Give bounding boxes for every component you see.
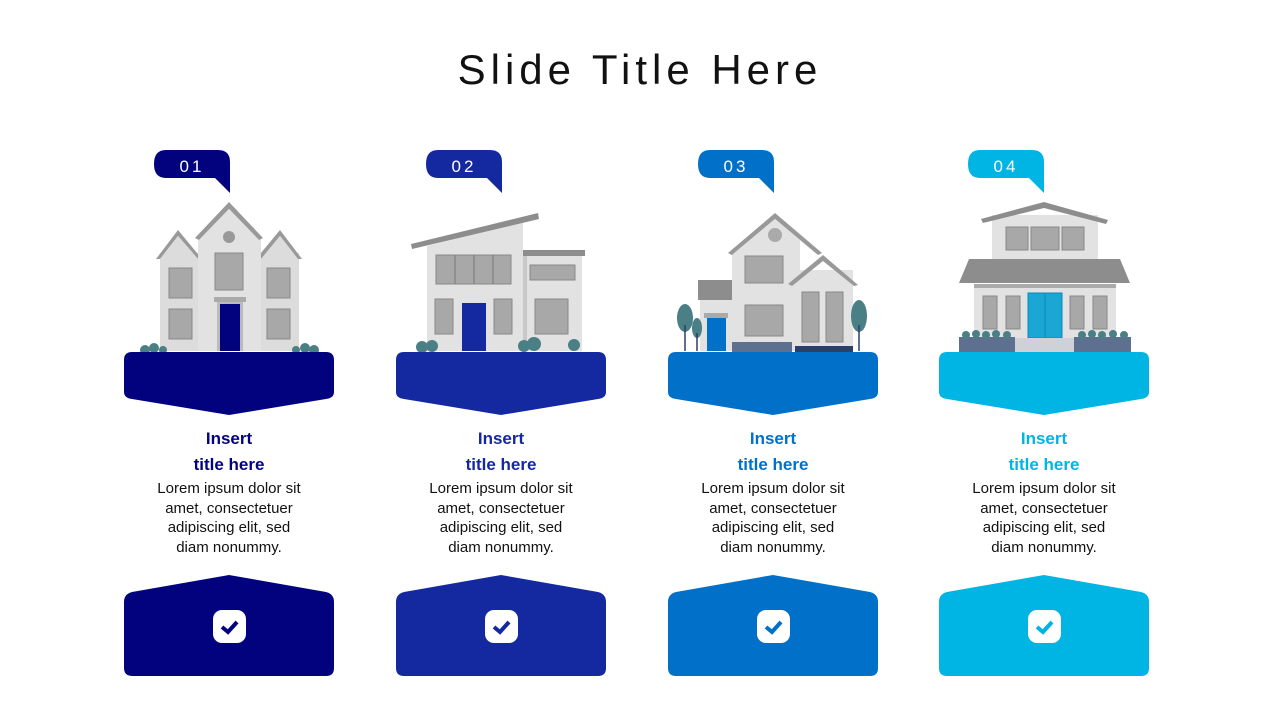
- top panel 3: [668, 352, 878, 415]
- badge 04: [968, 150, 1044, 193]
- text block 1: amet, consectetuer: [165, 500, 293, 516]
- text block 1: Lorem ipsum dolor sit: [157, 480, 301, 497]
- column 2: [396, 150, 606, 676]
- badge 03: 03: [724, 157, 748, 176]
- house 3: [677, 213, 867, 352]
- badge 02: 02: [452, 157, 476, 176]
- text block 4: Insert: [1021, 429, 1067, 448]
- house 4: [959, 202, 1131, 352]
- text block 1: [157, 429, 301, 556]
- badge 03: [698, 150, 774, 193]
- text block 3: amet, consectetuer: [709, 500, 837, 516]
- text block 2: [429, 429, 573, 556]
- top panel 2: [396, 352, 606, 415]
- text block 3: Insert: [750, 429, 796, 448]
- badge 01: 01: [180, 157, 204, 176]
- text block 4: adipiscing elit, sed: [983, 519, 1105, 536]
- text block 2: adipiscing elit, sed: [440, 519, 562, 536]
- text block 2: diam nonummy.: [448, 538, 554, 556]
- badge 02: [426, 150, 502, 193]
- column 4: [939, 150, 1149, 676]
- badge 04: 04: [994, 157, 1018, 176]
- text block 4: title here: [1009, 454, 1079, 474]
- bottom card 3: [668, 575, 878, 676]
- text block 3: [701, 429, 845, 556]
- text block 1: diam nonummy.: [176, 538, 282, 556]
- top panel 1: [124, 352, 334, 415]
- column 1: [124, 150, 334, 676]
- bottom card 1: [124, 575, 334, 676]
- column 3: [668, 150, 878, 676]
- text block 2: Lorem ipsum dolor sit: [429, 480, 573, 497]
- text block 3: adipiscing elit, sed: [712, 519, 834, 536]
- bottom card 4: [939, 575, 1149, 676]
- house 1: [140, 202, 319, 355]
- top panel 4: [939, 352, 1149, 415]
- title: Slide Title Here: [458, 46, 822, 93]
- text block 1: adipiscing elit, sed: [168, 519, 290, 536]
- text block 2: Insert: [478, 429, 524, 448]
- bottom card 2: [396, 575, 606, 676]
- text block 2: title here: [466, 454, 536, 474]
- text block 4: diam nonummy.: [991, 538, 1097, 556]
- text block 4: Lorem ipsum dolor sit: [972, 480, 1116, 497]
- text block 4: amet, consectetuer: [980, 500, 1108, 516]
- text block 1: title here: [194, 454, 264, 474]
- house 2: [411, 213, 585, 353]
- text block 2: amet, consectetuer: [437, 500, 565, 516]
- text block 3: title here: [738, 454, 808, 474]
- text block 4: [972, 429, 1116, 556]
- text block 3: diam nonummy.: [720, 538, 826, 556]
- badge 01: [154, 150, 230, 193]
- text block 3: Lorem ipsum dolor sit: [701, 480, 845, 497]
- text block 1: Insert: [206, 429, 252, 448]
